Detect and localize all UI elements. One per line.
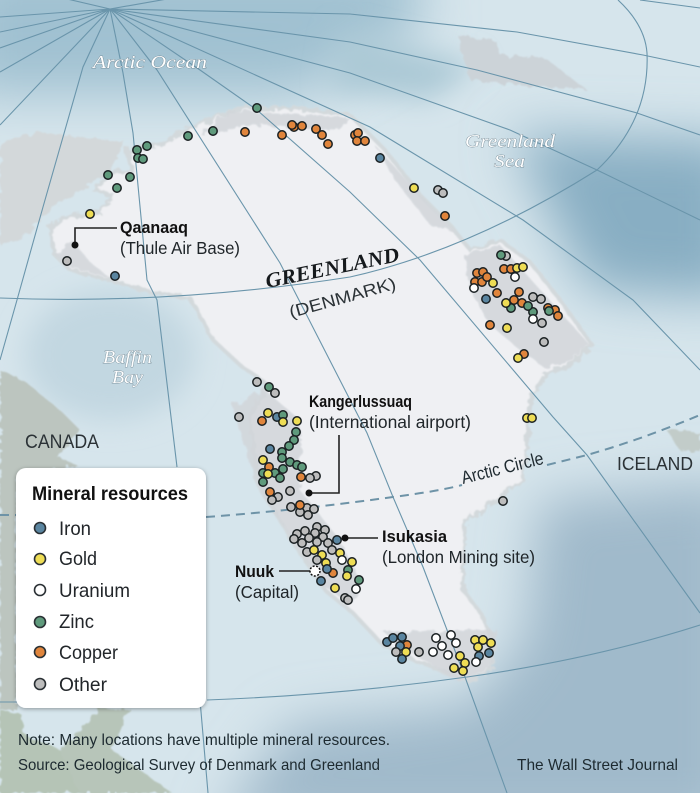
sea labels: Arctic Ocean — [92, 52, 207, 72]
legend title: Mineral resources — [32, 484, 188, 505]
legend entries: Iron — [59, 518, 91, 540]
mineral dots: west coast — [235, 378, 363, 604]
legend entries: Zinc — [59, 611, 94, 633]
sea labels — [92, 52, 556, 387]
sea labels: Baffin — [103, 347, 152, 367]
legend entries: Gold — [59, 548, 97, 570]
country labels: ICELAND — [617, 453, 693, 474]
rocky coast detail — [55, 110, 590, 682]
legend entries: Copper — [59, 642, 118, 664]
sea labels: Sea — [494, 151, 525, 171]
footer note and source: Source: Geological Survey of Denmark and Greenland — [18, 757, 380, 774]
sea labels: Greenland — [465, 131, 556, 151]
legend entries: Uranium — [59, 580, 130, 602]
Greenland landmass — [50, 108, 592, 680]
callout: Qaanaaq — [72, 218, 240, 258]
legend entries: Other — [59, 674, 107, 696]
footer note and source: The Wall Street Journal — [517, 757, 678, 774]
callout: Isukasia: (London Mining site) — [382, 547, 535, 567]
callout: Qaanaaq: Qaanaaq — [120, 218, 188, 237]
footer note and source: Note: Many locations have multiple mineral resources. — [18, 732, 390, 749]
legend panel — [16, 468, 206, 708]
callout: Nuuk: (Capital) — [235, 582, 299, 602]
callout: Qaanaaq: (Thule Air Base) — [120, 238, 240, 258]
country labels: GREENLAND — [263, 242, 401, 293]
callout: Kangerlussuaq: (International airport) — [309, 412, 471, 432]
mineral dots: north and northwest — [63, 104, 449, 280]
callout: Nuuk — [235, 562, 320, 602]
mineral dots: south tip — [383, 631, 495, 675]
sea labels: Bay — [112, 367, 143, 387]
callout: Kangerlussuaq — [306, 392, 471, 496]
legend entries — [34, 518, 130, 696]
country labels: CANADA — [25, 432, 99, 453]
country labels: Arctic Circle — [459, 448, 545, 488]
callout: Isukasia — [342, 527, 535, 567]
callout: Kangerlussuaq: Kangerlussuaq — [309, 392, 412, 411]
country labels — [25, 242, 693, 488]
callout: Nuuk: Nuuk — [235, 562, 275, 581]
Arctic Circle dashed line — [0, 415, 700, 517]
callout: Isukasia: Isukasia — [382, 527, 448, 546]
footer note and source — [18, 732, 678, 774]
country labels: (DENMARK) — [287, 274, 398, 322]
mineral dots: east coast — [470, 251, 562, 505]
